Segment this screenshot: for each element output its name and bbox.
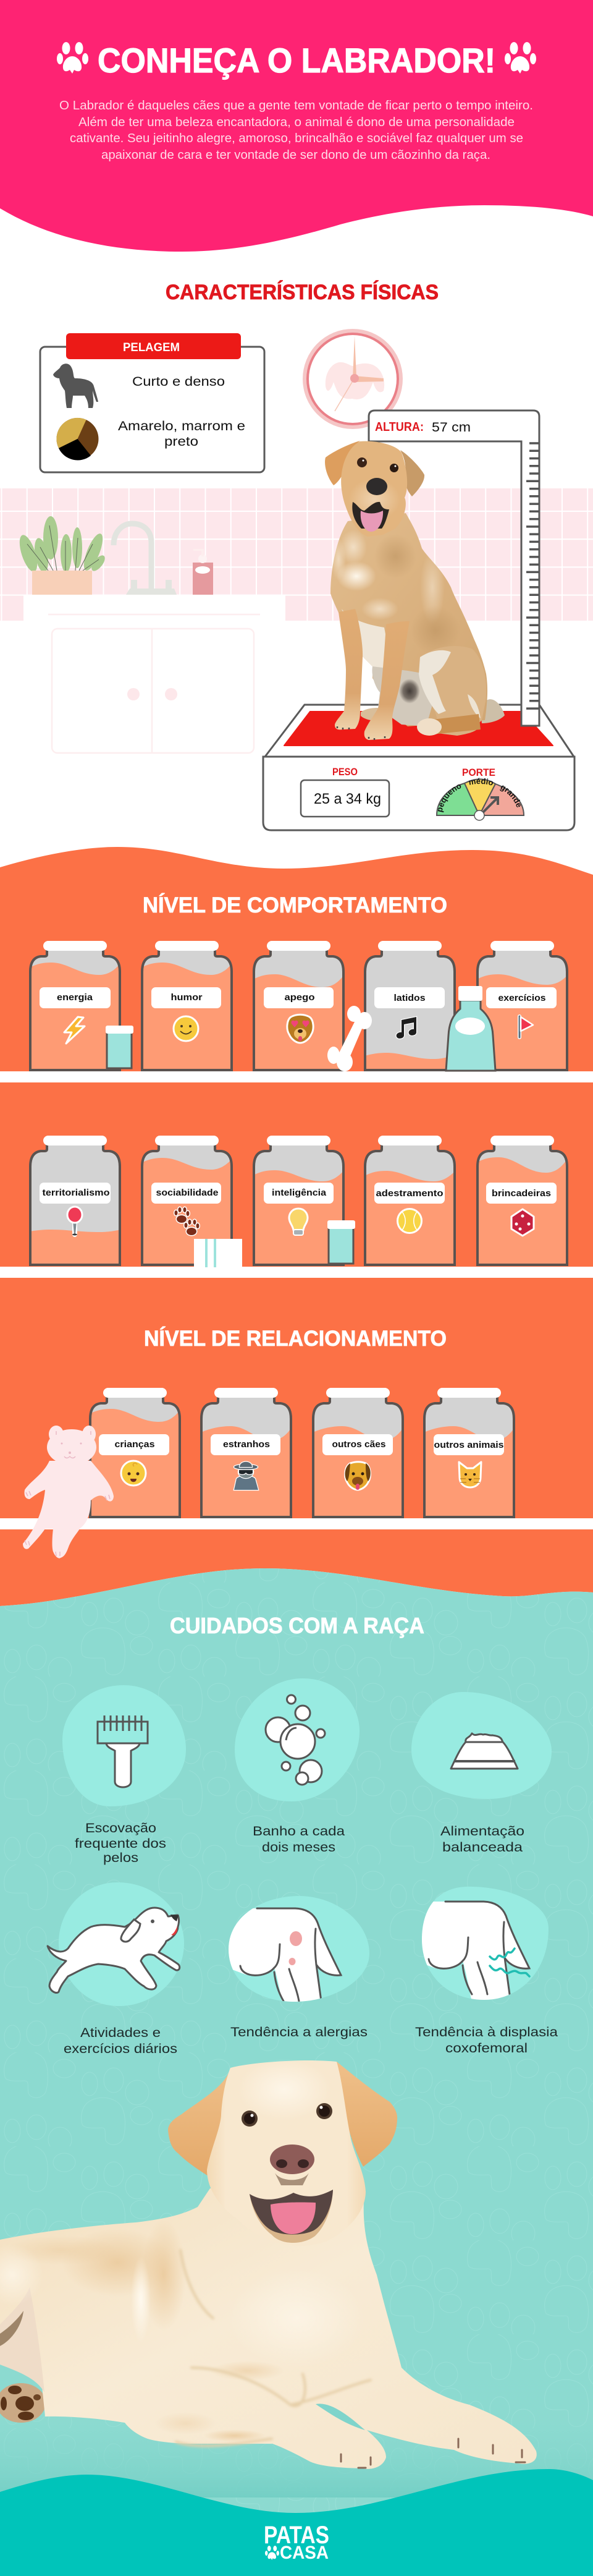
white box with stripes	[194, 1239, 242, 1269]
intro paragraph: apaixonar de cara e ter vontade de ser dono de um cãozinho da raça.	[101, 148, 490, 162]
weighing scale	[262, 704, 576, 831]
pelagem tab text: PELAGEM	[123, 341, 180, 354]
logo paw	[265, 2546, 279, 2560]
caption: Atividades e	[80, 2026, 161, 2040]
blob	[235, 1678, 360, 1801]
jar: outros animais	[424, 1388, 515, 1518]
mouth	[250, 2190, 333, 2235]
icon: lightning bolt	[64, 1017, 85, 1044]
porte gauge: grande	[500, 785, 521, 807]
caption: Tendência a alergias	[230, 2025, 368, 2039]
fur shading	[0, 2219, 364, 2442]
caption: Alimentação	[440, 1824, 524, 1838]
inner thigh	[419, 650, 451, 714]
mouth	[352, 502, 389, 529]
left ear	[325, 441, 360, 485]
shelf 3	[0, 1518, 593, 1529]
logo word 2: CASA	[280, 2543, 329, 2563]
caption: dois meses	[262, 1840, 335, 1855]
coat colour pie	[56, 418, 99, 460]
blob	[411, 1692, 552, 1799]
caption: Escovação	[85, 1821, 156, 1835]
caption	[75, 1821, 166, 1865]
photo: lying labrador	[0, 2059, 537, 2469]
blob	[229, 1896, 369, 2002]
claws	[337, 726, 385, 740]
heading: nível de relacionamento: NÍVEL DE RELACIONAMENTO	[144, 1326, 447, 1351]
jar: inteligência	[253, 1136, 344, 1265]
caption	[253, 1824, 345, 1855]
hind paw	[0, 2383, 46, 2423]
teal section background	[0, 1568, 593, 2576]
tongue	[361, 511, 383, 532]
jar: territorialismo	[30, 1136, 120, 1265]
shadow between legs	[372, 666, 432, 726]
caption: frequente dos	[75, 1837, 166, 1851]
peso value: 25 a 34 kg	[314, 791, 381, 807]
jar: adestramento	[364, 1136, 455, 1265]
icon: light bulb	[289, 1209, 308, 1235]
heading: cuidados com a raça: CUIDADOS COM A RAÇA	[170, 1613, 424, 1638]
icon: dog with heart eyes	[287, 1014, 313, 1043]
jar: estranhos: estranhos	[223, 1439, 270, 1450]
icon: baby face	[121, 1461, 146, 1486]
icon: dog rear with hip pain	[411, 1902, 529, 2002]
jar: latidos: latidos	[394, 993, 425, 1003]
jar: brincadeiras	[477, 1136, 568, 1265]
belly	[0, 2287, 44, 2392]
care item: alimentação	[411, 1692, 552, 1855]
icon: map pin	[67, 1207, 82, 1235]
care item: displasia	[411, 1887, 558, 2055]
jar: exercícios	[477, 941, 568, 1071]
nose	[366, 478, 387, 495]
orange section background	[0, 847, 593, 1606]
plant	[16, 516, 107, 595]
fur folds	[176, 2250, 371, 2446]
right ear	[327, 2062, 397, 2167]
caption: Tendência à displasia	[415, 2025, 558, 2039]
coat colours text: Amarelo, marrom e	[118, 419, 245, 433]
icon: spy	[234, 1462, 258, 1490]
pink wave background	[0, 0, 593, 252]
scale front	[263, 757, 574, 830]
icon: bubbles	[266, 1695, 325, 1785]
logo word 1: PATAS	[264, 2522, 329, 2549]
caption: coxofemoral	[445, 2041, 528, 2055]
icon: tennis ball	[398, 1209, 421, 1233]
bone	[327, 1006, 372, 1071]
small teal jar	[106, 1026, 133, 1068]
jar: crianças: crianças	[115, 1439, 154, 1450]
care item: atividades	[48, 1882, 184, 2056]
far paw	[361, 708, 378, 720]
blob	[422, 1887, 549, 2000]
jar: apego	[253, 941, 344, 1071]
jar: sociabilidade: sociabilidade	[156, 1188, 218, 1198]
coat colours text	[118, 419, 245, 449]
icon: dog rear with rash	[229, 1908, 342, 2002]
intro paragraph: O Labrador é daqueles cães que a gente tem vontade de ficar perto o tempo inteiro.	[59, 98, 533, 113]
jar: outros cães	[313, 1388, 403, 1518]
cabinet	[48, 614, 260, 753]
thigh highlight	[468, 694, 481, 718]
nose	[270, 2145, 314, 2185]
jar: latidos	[364, 941, 455, 1071]
jar: energia: energia	[57, 992, 93, 1003]
care item: banho	[235, 1678, 360, 1855]
caption: Banho a cada	[253, 1824, 345, 1838]
jar: inteligência: inteligência	[272, 1188, 327, 1198]
clock	[303, 329, 403, 429]
torso	[330, 513, 487, 726]
icon: left paw	[57, 42, 88, 74]
head	[207, 2060, 366, 2246]
title: CONHEÇA O LABRADOR!	[98, 41, 495, 80]
logo	[264, 2522, 329, 2563]
intro paragraph: Além de ter uma beleza encantadora, o animal é dono de uma personalidade	[78, 115, 515, 129]
jar: sociabilidade	[141, 1136, 232, 1265]
heading: nível de comportamento: NÍVEL DE COMPORTAMENTO	[143, 893, 447, 917]
icon: running dog	[48, 1908, 180, 1993]
icon: food bowl	[451, 1733, 518, 1769]
jar: exercícios: exercícios	[498, 993, 545, 1003]
jar: energia	[30, 941, 120, 1071]
jar: humor	[141, 941, 232, 1071]
front right leg	[364, 621, 410, 740]
care item: escovação	[62, 1685, 186, 1865]
rear paw	[417, 718, 442, 736]
belly	[342, 609, 408, 680]
blob	[62, 1685, 186, 1806]
icon: cat face	[459, 1462, 481, 1487]
icon: smile	[174, 1016, 198, 1041]
icon: dice	[511, 1209, 534, 1236]
porte gauge: pequeno	[437, 784, 461, 812]
soap bottle	[193, 549, 213, 595]
heading: características físicas: CARACTERÍSTICAS FÍSICAS	[166, 281, 439, 304]
pelagem tab	[66, 333, 241, 359]
crease	[0, 2311, 23, 2346]
shelf 1	[0, 1071, 593, 1082]
teddy bear	[23, 1426, 114, 1558]
icon: right paw	[505, 42, 536, 74]
eyes	[242, 2103, 332, 2127]
icon: brush	[98, 1715, 148, 1787]
left ear	[168, 2068, 235, 2176]
coat colours text: preto	[164, 435, 198, 449]
peso label: PESO	[332, 766, 358, 778]
coat length text: Curto e denso	[132, 375, 225, 389]
bathroom wall tiles	[0, 488, 593, 621]
jar: territorialismo: territorialismo	[42, 1188, 110, 1198]
eyes	[357, 457, 398, 472]
caption: exercícios diários	[64, 2042, 177, 2056]
icon: dog silhouette	[53, 363, 98, 408]
header panel	[0, 0, 593, 252]
caption	[415, 2025, 558, 2055]
photo: sitting labrador	[325, 441, 505, 740]
icon: music notes	[397, 1017, 416, 1039]
shelf 2	[0, 1267, 593, 1278]
icon: dog face	[345, 1462, 371, 1490]
intro paragraph	[59, 98, 533, 162]
jar: adestramento: adestramento	[376, 1188, 444, 1199]
front left leg	[335, 609, 363, 729]
peso box	[301, 780, 389, 817]
tail	[481, 699, 505, 723]
care item: alergias	[222, 1896, 369, 2039]
icon: flag	[519, 1016, 533, 1037]
altura label: ALTURA:	[375, 420, 424, 434]
jar: brincadeiras: brincadeiras	[492, 1188, 551, 1199]
caption: pelos	[103, 1851, 138, 1865]
caption: balanceada	[442, 1840, 523, 1855]
jar: estranhos	[201, 1388, 292, 1518]
head	[341, 441, 407, 537]
jar: humor: humor	[170, 992, 203, 1003]
gap between forelegs	[316, 2404, 365, 2430]
small teal jar	[327, 1220, 355, 1264]
height ruler	[369, 410, 539, 726]
body	[0, 2188, 537, 2469]
footer wave	[0, 2469, 593, 2576]
paw toes	[341, 2439, 525, 2468]
muzzle	[348, 478, 400, 521]
red mat	[284, 712, 553, 746]
altura value: 57 cm	[432, 420, 471, 435]
jar: outros cães: outros cães	[332, 1439, 385, 1450]
teal bottle	[446, 986, 495, 1071]
jaw	[250, 2190, 333, 2243]
panel: pelagem	[40, 333, 264, 472]
intro paragraph: cativante. Seu jeitinho alegre, amoroso, brincalhão e sociável faz qualquer um se	[70, 131, 523, 145]
haunch	[419, 646, 486, 736]
caption	[64, 2026, 177, 2056]
chest highlights	[331, 530, 460, 655]
forehead	[238, 2059, 330, 2120]
jar: outros animais: outros animais	[434, 1440, 504, 1450]
porte gauge: médio	[469, 778, 493, 785]
caption	[440, 1824, 524, 1855]
jar: crianças	[90, 1388, 180, 1518]
jar: apego: apego	[284, 992, 315, 1003]
blob	[59, 1882, 184, 2006]
icon: paw prints	[174, 1207, 199, 1235]
tongue	[271, 2202, 316, 2234]
ruler ticks	[526, 443, 539, 708]
porte label: PORTE	[462, 767, 495, 778]
porte gauge	[436, 778, 524, 821]
faucet	[114, 524, 177, 595]
right ear	[400, 450, 424, 496]
rear foot	[432, 714, 481, 734]
